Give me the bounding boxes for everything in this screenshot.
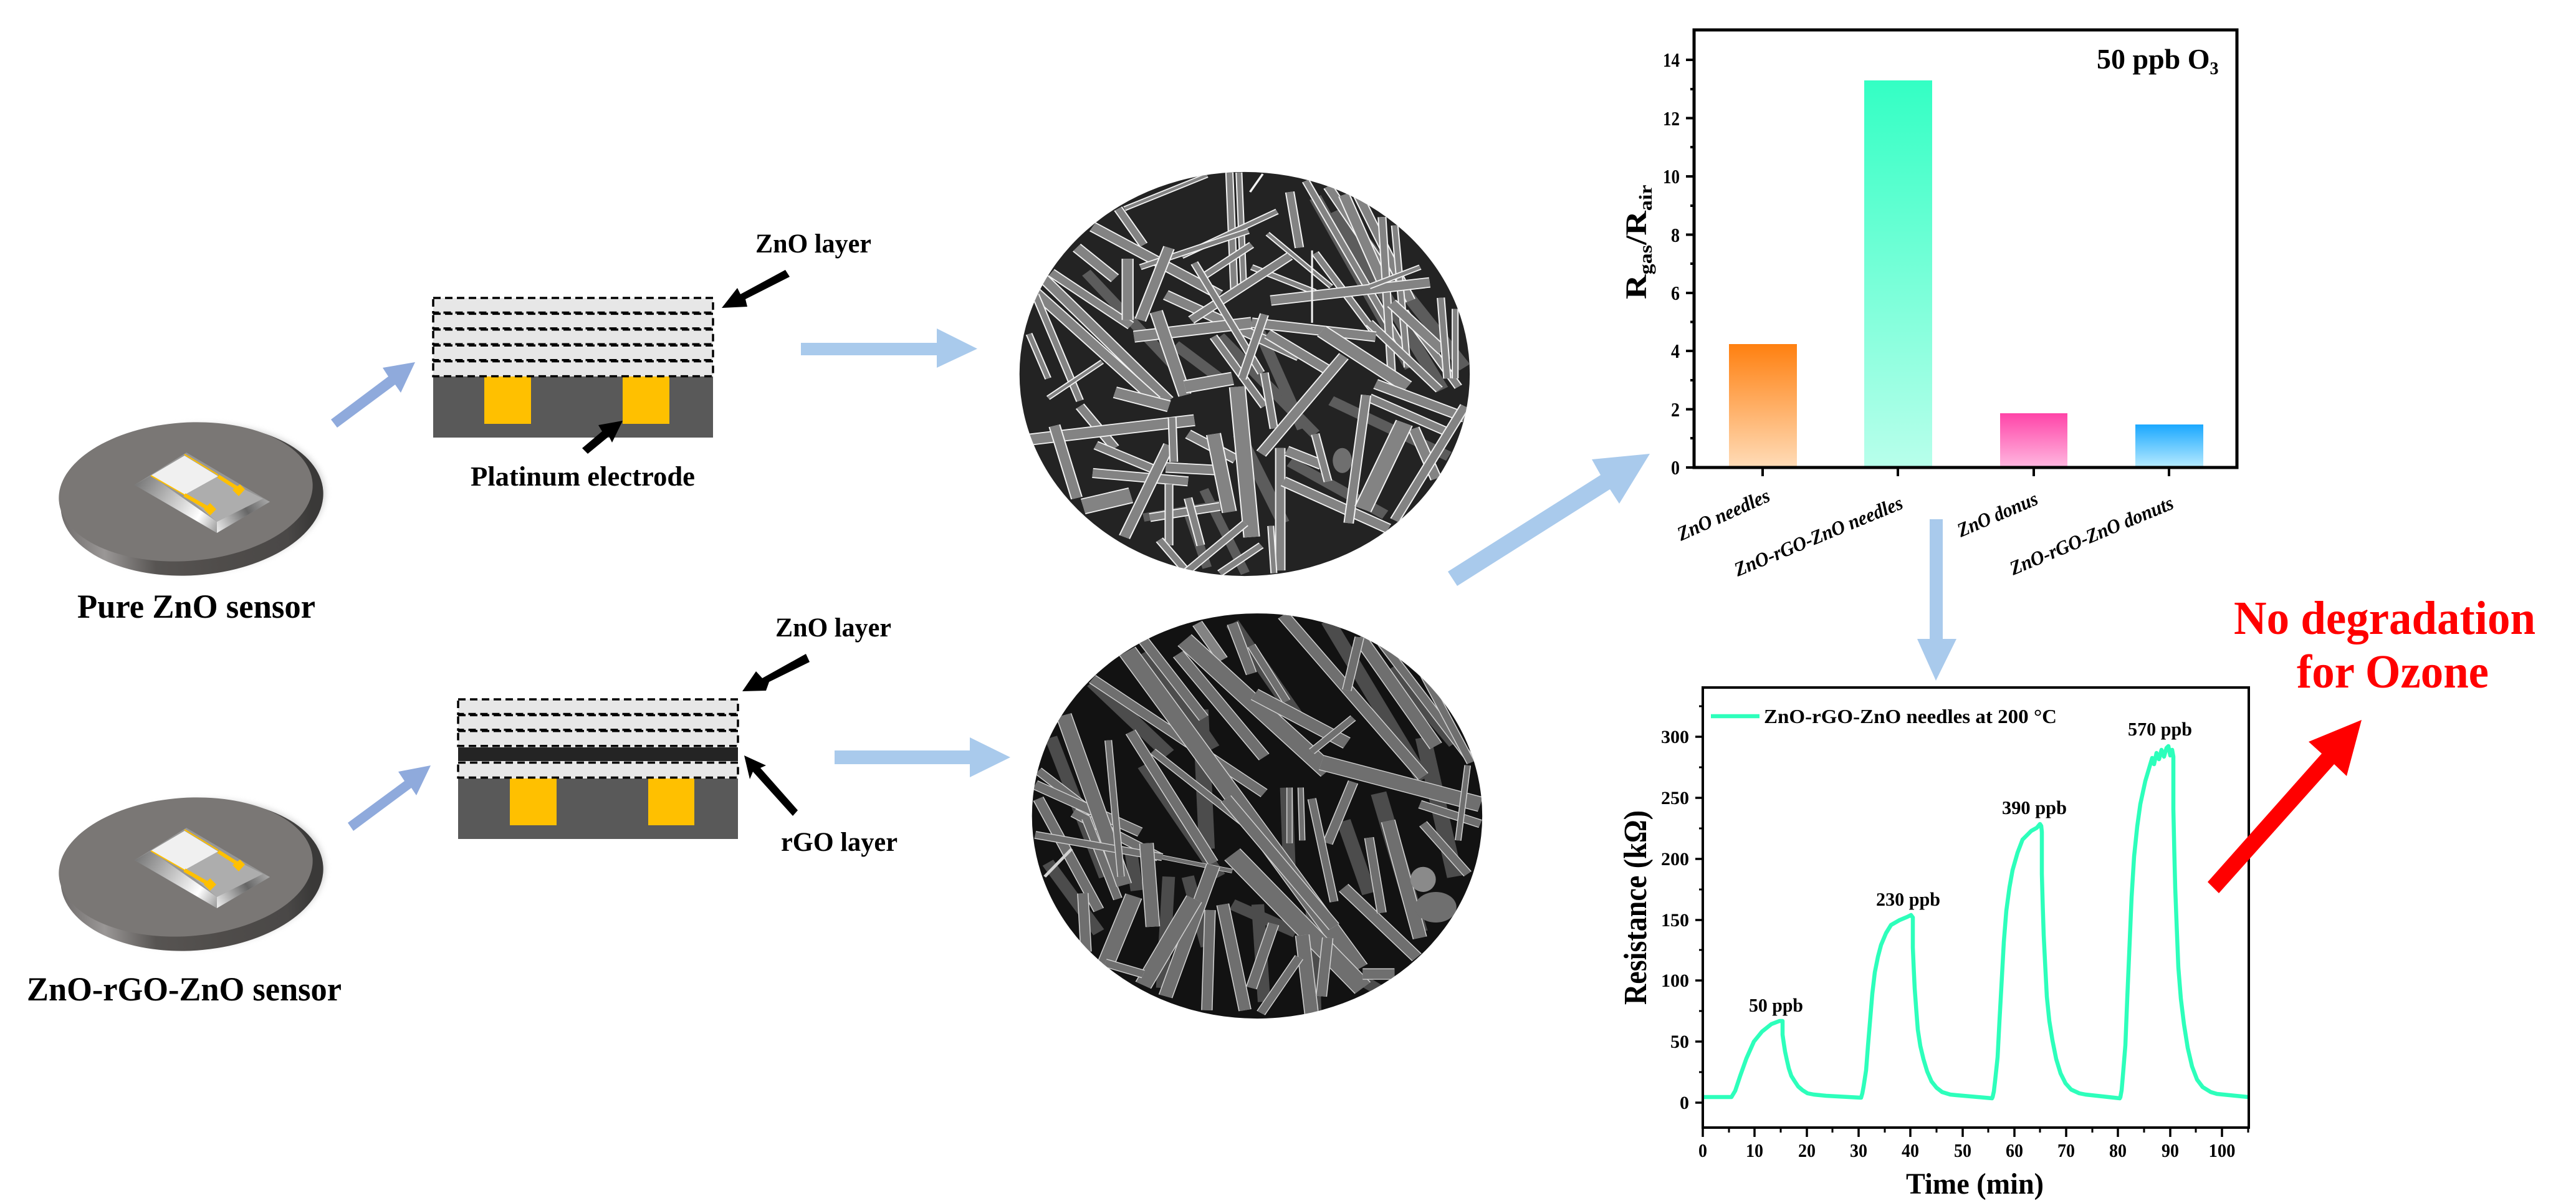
y tick labels: 0 [1671, 456, 1680, 479]
x category labels [1673, 484, 2176, 581]
annotation: 50 ppb O3: 50 ppb O [2097, 43, 2210, 75]
arrow: disc 1 to cross-section [331, 362, 415, 428]
arrow: to platinum electrode [582, 421, 623, 454]
y tick labels: 14 [1663, 49, 1680, 71]
bar: ZnO-rGO-ZnO needles [1864, 80, 1932, 467]
x category labels: ZnO donus [1953, 487, 2041, 542]
x tick labels: 80 [2109, 1139, 2127, 1161]
y tick labels: 8 [1671, 224, 1680, 246]
y tick labels: 10 [1663, 165, 1680, 188]
conclusion text: No degradation for Ozone [2234, 592, 2535, 698]
peak labels: 50 ppb [1749, 994, 1803, 1016]
x category labels: ZnO-rGO-ZnO needles [1730, 491, 1906, 581]
peak labels: 230 ppb [1876, 888, 1940, 910]
sensor disc: ZnO-rGO-ZnO sensor [54, 789, 330, 959]
y tick labels: 6 [1671, 282, 1680, 304]
y tick labels: 300 [1661, 727, 1689, 747]
y tick labels: 100 [1661, 971, 1689, 991]
arrow: cross-section 1 to SEM image [801, 328, 977, 368]
peak labels [1749, 718, 2192, 1016]
y axis title: gas [1635, 245, 1656, 274]
annotation: 50 ppb O3: 3 [2210, 59, 2219, 79]
SEM image: ZnO-rGO-ZnO needles [1029, 610, 1487, 1024]
label: ZnO layer (top): ZnO layer [755, 229, 871, 259]
x tick labels: 20 [1798, 1139, 1816, 1161]
x tick labels: 60 [2006, 1139, 2023, 1161]
arrow: cross-section 2 to SEM image [835, 737, 1010, 777]
cross-section: ZnO-rGO-ZnO device [458, 699, 738, 839]
label: Platinum electrode: Platinum electrode [471, 461, 695, 492]
x tick labels [1698, 1139, 2235, 1161]
y axis title: /R [1620, 210, 1653, 246]
arrow: to rGO layer [744, 755, 798, 816]
label: rGO layer: rGO layer [781, 828, 898, 857]
y tick labels: 150 [1661, 910, 1689, 931]
bar chart: response at 50 ppb O3 [1620, 30, 2237, 581]
conclusion text: No degradation for Ozone: No degradation [2234, 592, 2535, 645]
label: ZnO-rGO-ZnO sensor: ZnO-rGO-ZnO sensor [27, 971, 342, 1008]
x tick labels: 30 [1850, 1139, 1867, 1161]
x tick labels: 100 [2209, 1139, 2235, 1161]
resistance curve [1703, 746, 2248, 1098]
label: Pure ZnO sensor: Pure ZnO sensor [77, 588, 315, 625]
y tick labels: 250 [1661, 788, 1689, 808]
x tick labels: 70 [2057, 1139, 2075, 1161]
peak labels: 570 ppb [2128, 718, 2192, 740]
x tick labels: 90 [2162, 1139, 2179, 1161]
label: ZnO layer (bottom): ZnO layer [775, 613, 891, 643]
arrow: SEM images to bar chart [1448, 454, 1650, 586]
y tick labels: 2 [1671, 398, 1680, 421]
y tick labels: 12 [1663, 107, 1680, 130]
line chart: resistance vs time [1618, 688, 2249, 1201]
x tick labels: 40 [1902, 1139, 1919, 1161]
legend: ZnO-rGO-ZnO needles at 200 °C [1764, 705, 2057, 727]
y tick labels: 4 [1671, 340, 1680, 362]
peak labels: 390 ppb [2002, 797, 2067, 818]
conclusion text: No degradation for Ozone: for Ozone [2297, 646, 2489, 698]
y axis title: Resistance (kΩ) [1618, 810, 1654, 1005]
bar: ZnO-rGO-ZnO donuts [2135, 424, 2203, 467]
x category labels: ZnO needles [1673, 484, 1773, 545]
y tick labels [1661, 727, 1689, 1113]
arrow: bar chart to resistance chart [1917, 519, 1956, 681]
y axis title: air [1635, 185, 1656, 211]
y tick labels: 200 [1661, 849, 1689, 870]
x tick labels: 10 [1746, 1139, 1763, 1161]
y tick labels: 0 [1680, 1093, 1689, 1113]
arrow: to ZnO layer (top) [722, 270, 790, 308]
arrow: disc 2 to cross-section [348, 765, 431, 831]
sensor disc: pure ZnO sensor [54, 414, 330, 584]
bar: ZnO needles [1729, 344, 1797, 467]
bar: ZnO donus [2000, 413, 2067, 467]
arrow: red, toward conclusion [2208, 720, 2362, 893]
y tick labels: 50 [1670, 1032, 1689, 1052]
cross-section: pure ZnO device [433, 298, 713, 438]
SEM image: ZnO needles [1017, 170, 1474, 579]
y tick labels [1663, 49, 1680, 479]
x axis title: Time (min) [1906, 1167, 2044, 1201]
y axis title: R [1620, 274, 1653, 299]
x category labels: ZnO-rGO-ZnO donuts [2006, 491, 2176, 580]
arrow: to ZnO layer (bottom) [742, 654, 810, 691]
x tick labels: 0 [1698, 1139, 1707, 1161]
x tick labels: 50 [1954, 1139, 1971, 1161]
